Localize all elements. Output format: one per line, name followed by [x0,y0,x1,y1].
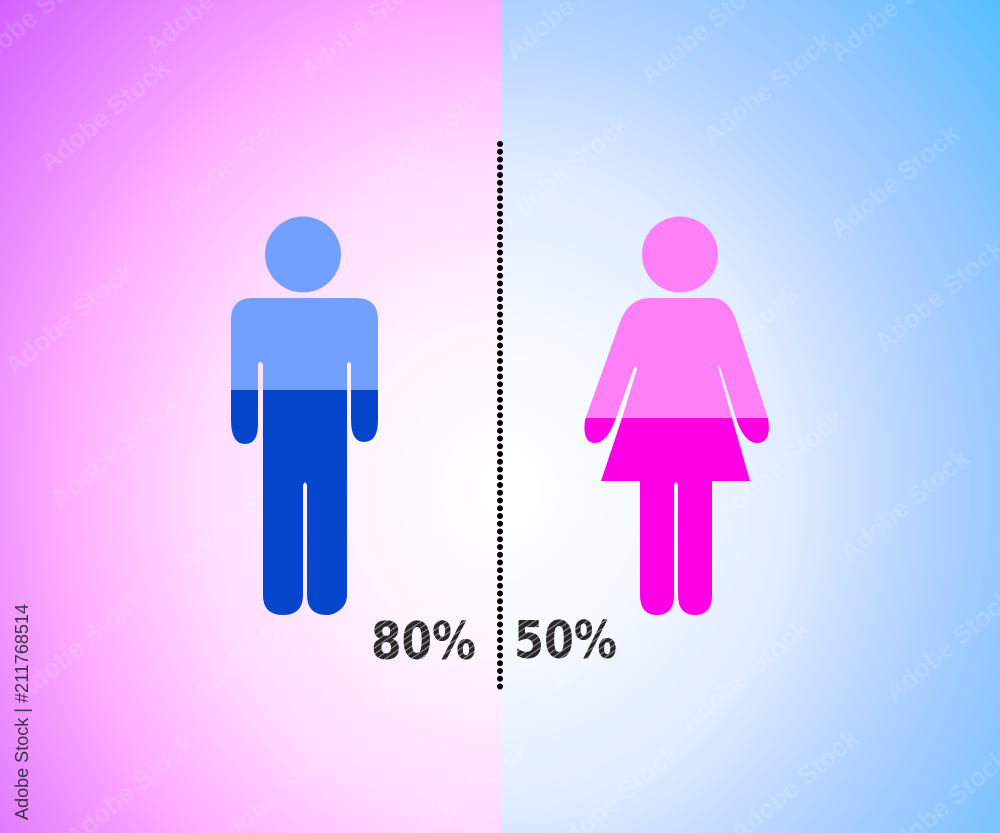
stock watermarks: Adobe Stock [339,612,480,738]
man body unfilled upper part [231,298,378,390]
woman body filled lower part [578,418,778,620]
icon: woman figure filled to 50% [578,216,778,620]
stock watermarks: Adobe Stock [709,402,850,528]
stock watermarks: Adobe Stock [674,612,815,738]
panel: left pink background [0,0,502,833]
stock watermarks: Adobe Stock [697,25,838,151]
woman body unfilled upper part [586,298,768,418]
stock watermarks: Adobe Stock [664,278,805,404]
icon: man figure filled to 80% [225,216,385,620]
stock id vertical text: Adobe Stock | #211768514 [12,604,32,820]
stock watermarks: Adobe Stock [544,572,685,698]
stock watermarks: Adobe Stock [171,452,312,578]
stock watermarks: Adobe Stock [161,98,302,224]
stock watermarks: Adobe Stock [44,388,185,514]
stock watermarks: Adobe Stock [334,258,475,384]
panel: right blue background [502,0,1000,833]
stock watermarks: Adobe Stock [186,582,327,708]
label: woman percentage 50%: 50% [514,611,617,671]
man head [265,216,341,292]
woman head [642,216,718,292]
stock watermarks: Adobe Stock [374,402,515,528]
stock watermarks: Adobe Stock [9,582,150,708]
stock watermarks: Adobe Stock [502,452,643,578]
man body filled lower part [231,390,378,615]
stock watermarks: Adobe Stock [34,52,175,178]
stock watermarks: Adobe Stock [834,442,975,568]
stock watermarks: Adobe Stock [367,65,508,191]
stock watermarks: Adobe Stock [494,108,635,234]
stock watermarks: Adobe Stock [534,252,675,378]
stock watermarks: Adobe Stock [0,255,140,381]
stock watermarks: Adobe Stock [824,118,965,244]
dotted vertical divider [497,144,503,688]
label: man percentage 80%: 80% [371,612,476,672]
